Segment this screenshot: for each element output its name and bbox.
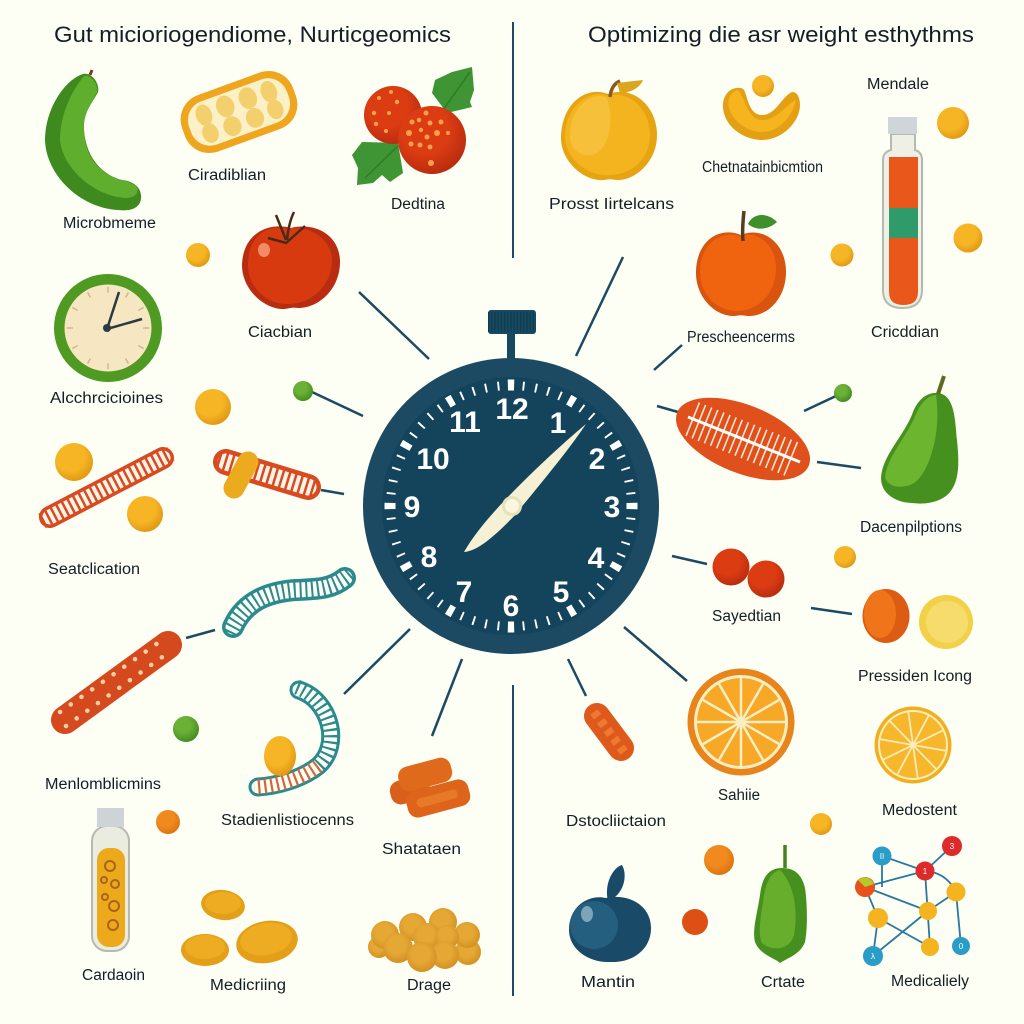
- icon: orange chunks: [388, 755, 473, 820]
- label: Medicaliely: [891, 973, 969, 990]
- icon: yellow crescent: [723, 75, 800, 140]
- clock numbers: 1: [550, 407, 566, 440]
- label: Prosst Iirtelcans: [549, 196, 674, 213]
- clock numbers: 7: [456, 576, 472, 609]
- icon: navy apple: [569, 865, 651, 962]
- icon: teal worm: [230, 574, 350, 633]
- icon: red berries with leaves: [352, 67, 474, 185]
- dot: [156, 810, 180, 834]
- icon: orange fruit: [862, 589, 910, 643]
- label: Ciacbian: [248, 324, 312, 341]
- dot: [682, 909, 708, 935]
- label: Chetnatainbicmtion: [702, 159, 823, 176]
- icon: clock: [54, 274, 162, 382]
- clock numbers: 2: [589, 443, 605, 476]
- label: Pressiden Icong: [858, 668, 972, 685]
- icon: orange slice large: [688, 668, 794, 776]
- icon: two red berries: [712, 548, 784, 598]
- label: Seatclication: [48, 561, 140, 578]
- connector lines: [186, 257, 861, 736]
- label: Cardaoin: [82, 967, 145, 984]
- icon: test tube yellow: [92, 808, 129, 951]
- clock numbers: 11: [449, 406, 481, 439]
- label: Mendale: [867, 76, 929, 93]
- icon: citrus slice: [173, 64, 305, 160]
- icon: molecular network: [855, 836, 970, 966]
- label: Stadienlistiocenns: [221, 812, 354, 829]
- center divider top: [512, 22, 514, 258]
- dot: [954, 224, 982, 252]
- label: Crtate: [761, 974, 805, 991]
- icon: curved teal worm: [254, 687, 331, 787]
- icon: molecular network: II: [880, 852, 884, 861]
- icon: nut cluster: [368, 908, 481, 972]
- clock numbers: [404, 393, 620, 623]
- icon: orange rod: [60, 638, 172, 726]
- clock hands: [464, 424, 586, 552]
- label: Drage: [407, 977, 451, 994]
- icon: molecular network: 0: [959, 942, 964, 951]
- clock numbers: 10: [416, 443, 450, 476]
- clock ticks: [390, 385, 632, 627]
- label: Sahiie: [718, 787, 760, 804]
- green pin: [293, 381, 313, 401]
- dot: [937, 107, 969, 139]
- label: Ciradiblian: [188, 167, 266, 184]
- dot: [186, 243, 210, 267]
- icon: test tube orange: [883, 117, 922, 308]
- label: Mantin: [581, 974, 635, 991]
- label: Prescheencerms: [687, 329, 795, 346]
- label: Shatataen: [382, 841, 461, 858]
- green dot: [173, 716, 199, 742]
- icon: striped bacterium with capsule: [218, 460, 316, 490]
- clock numbers: 5: [553, 576, 569, 609]
- icon: green pepper: [754, 845, 807, 963]
- label: Medostent: [882, 802, 958, 819]
- icon: green pear: [881, 376, 958, 504]
- title: right: Optimizing die asr weight esthythms: [588, 22, 974, 47]
- label: Dacenpilptions: [860, 519, 962, 536]
- clock numbers: 6: [503, 590, 519, 623]
- label: Alcchrcicioines: [50, 390, 163, 407]
- label: Sayedtian: [712, 608, 781, 625]
- icon: green cucumber: [45, 70, 141, 210]
- clock numbers: 3: [604, 491, 620, 524]
- label: Microbmeme: [63, 215, 156, 232]
- label: Dstocliictaion: [566, 813, 666, 830]
- clock numbers: 12: [495, 393, 529, 426]
- icon: red apple: [242, 212, 340, 309]
- label: Medicriing: [210, 977, 286, 994]
- label: Cricddian: [871, 324, 939, 341]
- label: Menlomblicmins: [45, 776, 161, 793]
- green pin: [834, 384, 852, 402]
- clock numbers: 8: [421, 541, 437, 574]
- icon: molecular network: 3: [950, 842, 955, 851]
- icon: molecular network: λ: [871, 952, 875, 961]
- dot: [834, 546, 856, 568]
- icon: orange capsule: [594, 712, 624, 752]
- clock numbers: 9: [404, 491, 420, 524]
- icon: yellow apple: [561, 80, 657, 180]
- title: left: Gut micioriogendiome, Nurticgeomics: [54, 22, 451, 47]
- dot: [830, 244, 854, 266]
- dot: [704, 845, 734, 875]
- icon: orange apple: [696, 211, 786, 316]
- dot: [810, 813, 832, 835]
- dot: [127, 496, 163, 532]
- icon: lemon slice: [919, 595, 973, 649]
- icon: orange slice small: [874, 706, 952, 784]
- icon: molecular network: 1: [923, 867, 928, 876]
- stopwatch: [363, 310, 659, 654]
- icon: orange striped lozenge: [664, 381, 822, 497]
- label: Dedtina: [391, 196, 445, 213]
- center divider bottom: [512, 685, 514, 996]
- icon: striped bacterium: [42, 454, 171, 521]
- dot: [195, 389, 231, 425]
- clock numbers: 4: [588, 542, 605, 575]
- dot: [55, 443, 93, 481]
- icon: yellow pills: [181, 887, 301, 968]
